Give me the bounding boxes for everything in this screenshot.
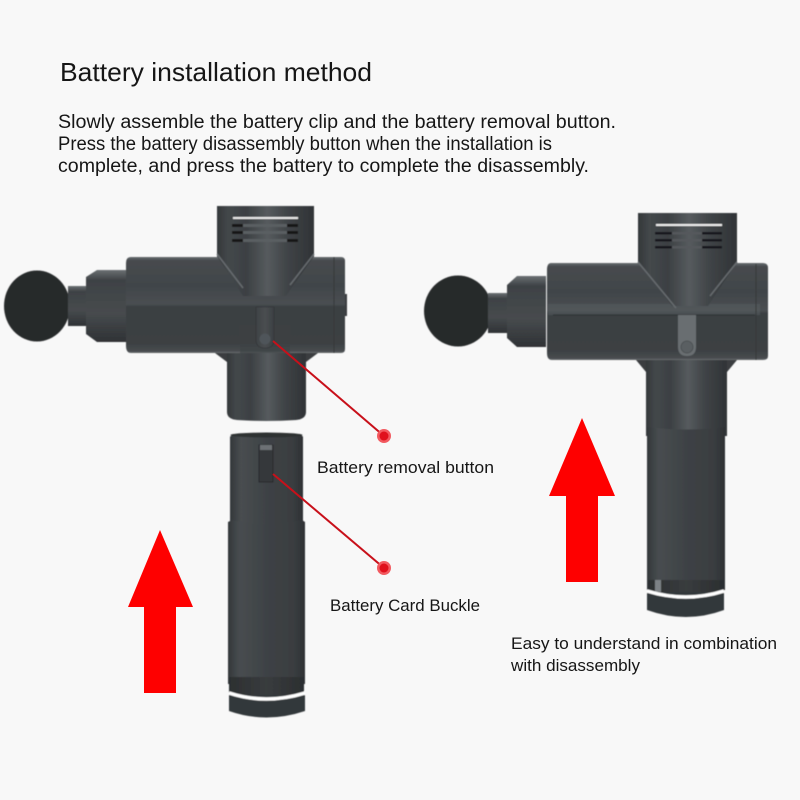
massage gun without battery (left): [4, 206, 347, 421]
note text: with disassembly: [510, 656, 640, 675]
callout: battery card buckle: [273, 474, 480, 615]
main body: [126, 257, 345, 353]
head to body junction: [217, 256, 314, 296]
head to body junction: [638, 262, 737, 306]
battery removal button: [256, 307, 274, 348]
body highlight: [548, 304, 760, 315]
massage ball head: [424, 276, 492, 346]
battery base band: [648, 580, 724, 600]
neck: [488, 293, 508, 333]
handle stub: [227, 340, 306, 421]
white ring: [647, 591, 724, 597]
note text: [510, 634, 777, 675]
battery base band: [229, 677, 304, 701]
top rim: [230, 432, 302, 438]
collar: [507, 276, 546, 347]
title: Battery installation method: [60, 57, 372, 87]
battery foot: [647, 592, 724, 617]
marker dot: [377, 561, 391, 575]
leader line: [273, 341, 384, 436]
red arrow (left): [128, 530, 193, 693]
battery pack (left): [228, 432, 305, 718]
callout: battery removal button: [273, 341, 494, 477]
massage ball head: [4, 270, 70, 342]
note text: Easy to understand in combination: [511, 634, 777, 653]
red arrow (right): [549, 418, 615, 582]
main body: [547, 263, 768, 360]
battery foot: [229, 695, 305, 718]
collar: [86, 270, 126, 342]
white ring: [229, 693, 305, 699]
battery main sleeve: [228, 520, 305, 684]
label: Battery Card Buckle: [330, 596, 480, 615]
label: Battery removal button: [317, 458, 494, 477]
handle: [646, 345, 727, 436]
battery removal button: [678, 315, 696, 356]
marker dot: [377, 429, 391, 443]
head cylinder: [638, 213, 737, 268]
vent slots: [232, 217, 298, 242]
instructions text block: complete, and press the battery to complete the disassembly.: [58, 156, 589, 177]
massage gun with battery installed (right): [424, 213, 768, 617]
battery body: [647, 427, 725, 590]
instructions text block: Press the battery disassembly button when the installation is: [58, 134, 552, 155]
head cylinder: [217, 206, 314, 260]
rear cap seam: [333, 257, 335, 353]
instructions text block: [58, 112, 616, 177]
battery top section: [230, 433, 303, 532]
handle to body junction: [636, 360, 737, 372]
handle to body junction: [215, 353, 318, 362]
battery card buckle slot: [259, 445, 273, 482]
vent slots: [655, 224, 722, 248]
neck: [68, 286, 87, 326]
instructions text block: Slowly assemble the battery clip and the battery removal button.: [58, 112, 616, 133]
leader line: [273, 474, 384, 568]
body seam: [553, 314, 755, 316]
